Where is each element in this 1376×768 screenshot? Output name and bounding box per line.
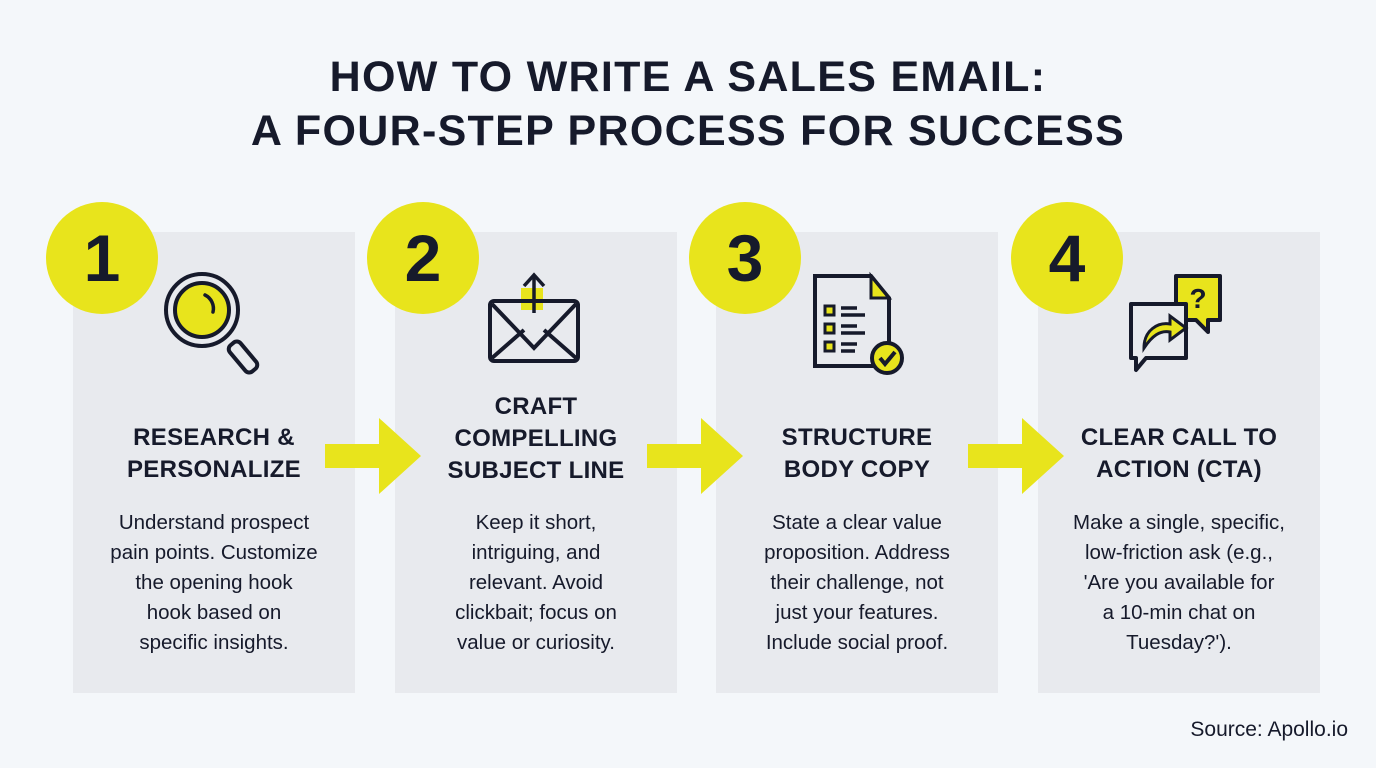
panel: step 3 — [716, 232, 998, 693]
body text: Understand prospect — [119, 511, 309, 534]
body text: specific insights. — [139, 631, 289, 654]
heading — [782, 424, 932, 483]
body text: the opening hook — [135, 571, 293, 594]
heading — [448, 393, 624, 484]
heading: ACTION (CTA) — [1096, 456, 1262, 483]
heading: BODY COPY — [784, 456, 930, 483]
heading — [127, 424, 301, 483]
body text — [110, 511, 318, 654]
body text: intriguing, and — [472, 541, 600, 564]
heading: RESEARCH & — [133, 424, 295, 451]
body text: relevant. Avoid — [469, 571, 603, 594]
body text — [1073, 511, 1285, 654]
number badge 2 — [367, 202, 479, 314]
body text: pain points. Customize — [110, 541, 318, 564]
number badge 1 — [46, 202, 158, 314]
number badge 1: 1 — [84, 221, 120, 295]
number badge 3 — [689, 202, 801, 314]
body text: low-friction ask (e.g., — [1085, 541, 1273, 564]
title: A FOUR-STEP PROCESS FOR SUCCESS — [251, 107, 1125, 155]
body text: proposition. Address — [764, 541, 950, 564]
body text: Include social proof. — [766, 631, 948, 654]
number badge 4: 4 — [1049, 221, 1085, 295]
icon: chat bubbles — [1129, 274, 1222, 372]
number badge 4 — [1011, 202, 1123, 314]
source: Source: Apollo.io — [1190, 718, 1348, 741]
arrow 2 — [647, 418, 743, 494]
body text: their challenge, not — [770, 571, 944, 594]
heading: CLEAR CALL TO — [1081, 424, 1277, 451]
heading: PERSONALIZE — [127, 456, 301, 483]
body text: just your features. — [776, 601, 938, 624]
panel: step 2 — [395, 232, 677, 693]
title — [251, 53, 1125, 155]
body text: 'Are you available for — [1084, 571, 1274, 594]
heading: CRAFT — [495, 393, 577, 420]
panel: step 4 — [1038, 232, 1320, 693]
body text: clickbait; focus on — [455, 601, 617, 624]
heading — [1081, 424, 1277, 483]
body text: hook based on — [147, 601, 281, 624]
body text: Keep it short, — [476, 511, 596, 534]
icon: envelope — [488, 272, 580, 363]
body text: a 10-min chat on — [1103, 601, 1255, 624]
body text: value or curiosity. — [457, 631, 615, 654]
body text: Make a single, specific, — [1073, 511, 1285, 534]
heading: SUBJECT LINE — [448, 457, 624, 484]
icon: checklist document — [813, 272, 904, 375]
heading: STRUCTURE — [782, 424, 932, 451]
icon: magnifier — [164, 272, 260, 374]
title: HOW TO WRITE A SALES EMAIL: — [330, 53, 1046, 101]
arrow 3 — [968, 418, 1064, 494]
heading: COMPELLING — [454, 425, 618, 452]
icon: chat bubbles: ? — [1189, 283, 1207, 314]
arrow 1 — [325, 418, 421, 494]
panel: step 1 — [73, 232, 355, 693]
number badge 3: 3 — [727, 221, 763, 295]
body text: Tuesday?'). — [1126, 631, 1232, 654]
number badge 2: 2 — [405, 221, 441, 295]
body text — [455, 511, 617, 654]
body text: State a clear value — [772, 511, 942, 534]
body text — [764, 511, 950, 654]
